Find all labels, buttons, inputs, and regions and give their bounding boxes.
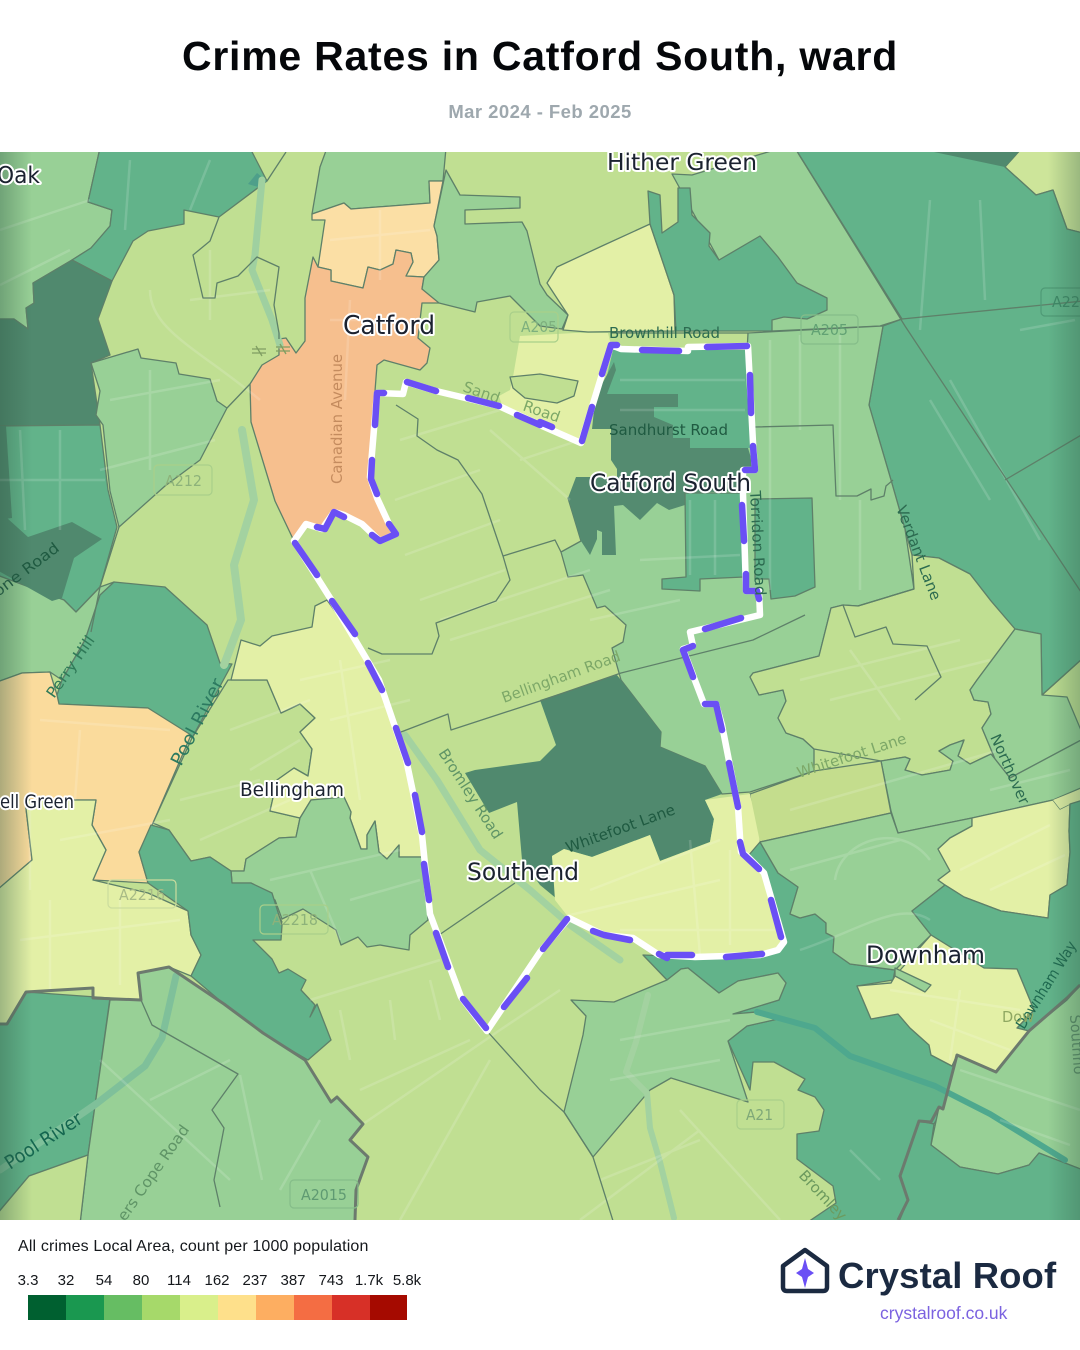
area: north centre medium	[312, 148, 446, 214]
ward outline purple dashes	[295, 345, 781, 1028]
shield: A21	[737, 1100, 784, 1129]
boundary: Sandhurst east block	[755, 425, 893, 500]
place label: Downham: Downham	[866, 941, 985, 969]
area: dark strip top	[915, 148, 1022, 167]
legend tick labels: 237	[242, 1272, 268, 1289]
boundary: north diagonal	[267, 152, 286, 181]
road label: Downham road faded: Dow	[1002, 1008, 1034, 1026]
area: A2218 notch pale	[246, 910, 282, 925]
boundary: railway junction	[227, 384, 250, 408]
place labels	[0, 150, 985, 969]
place label: Catford: Catford	[343, 311, 435, 341]
road label: Verdant Lane: Verdant Lane	[892, 503, 945, 603]
area: north-west teal river fragment	[248, 173, 267, 187]
shield: A205 east	[801, 315, 858, 344]
shield: A2015	[290, 1180, 358, 1208]
legend tick labels	[18, 1272, 422, 1289]
road shields	[108, 288, 1080, 1208]
legend tick labels: 3.3	[18, 1272, 38, 1289]
area boundary lines	[91, 152, 1080, 1224]
thick outer borough boundary	[0, 967, 1080, 1220]
area: Southend pale yellow	[552, 794, 784, 957]
legend colour scale	[28, 1295, 407, 1320]
road labels	[0, 324, 1080, 1224]
area: pale yellow west of ward	[231, 600, 424, 859]
logo url: crystalroof.co.uk	[880, 1303, 1007, 1323]
shield: A2216	[108, 880, 176, 908]
road label: Whitefoot Lane west: Whitefoot Lane	[563, 801, 677, 857]
edge shading	[0, 152, 1080, 1220]
area: Oak medium	[0, 148, 112, 329]
icon: house with star	[780, 1248, 830, 1294]
area: north-centre right medium	[422, 170, 568, 329]
area: light green strip	[510, 374, 578, 403]
boundary: main east-west road	[401, 589, 914, 732]
area: north pale orange	[312, 181, 443, 288]
area: corner pale yellow	[1053, 788, 1080, 809]
boundary: Verdant interior	[843, 605, 1080, 700]
road label: Bromley Road north: Bromley Road	[435, 745, 506, 842]
area: Hither Green strong	[648, 188, 827, 331]
choropleth map	[0, 152, 1080, 1220]
title: Crime Rates in Catford South, ward	[182, 33, 898, 79]
area: lower Northover medium	[881, 739, 1080, 833]
road label: Brownhill Road: Brownhill Road	[609, 324, 720, 342]
boundary: ward interior middle	[503, 540, 561, 556]
legend tick labels: 32	[58, 1272, 74, 1289]
boundary: south-west inner	[141, 1000, 238, 1207]
legend tick labels: 80	[133, 1272, 149, 1289]
shield: A2218	[260, 905, 328, 934]
shield: A22	[1041, 288, 1080, 316]
area: south of Bellingham medium	[231, 797, 428, 950]
area: bottom left light	[0, 1155, 88, 1224]
road label: Torridon Road: Torridon Road	[746, 489, 769, 596]
place label: Bell Green: ell Green	[0, 791, 74, 813]
road label under ward line: Sandhurst Road upper	[461, 378, 562, 426]
river: south-east	[757, 1012, 1065, 1160]
boundary: south-east diagonal	[487, 1031, 614, 1224]
area: west dark	[0, 260, 112, 426]
borough boundary: south-east	[898, 985, 1080, 1220]
road label: Whitefoot Lane east: Whitefoot Lane	[795, 729, 909, 782]
place label: Catford South: Catford South	[590, 469, 751, 497]
map base: light green areas	[0, 152, 1080, 1220]
area: ward central and eastern medium	[561, 326, 914, 794]
place label: Bellingham: Bellingham	[240, 779, 344, 801]
road label: Sandhurst Road: Sandhurst Road	[609, 421, 728, 439]
subtitle: date range: Mar 2024 - Feb 2025	[448, 101, 632, 122]
area: Beckenham Hill medium	[564, 968, 786, 1157]
area: west edge dark strip	[0, 426, 12, 520]
area: Downham medium	[760, 813, 972, 970]
area: Downham Way strong	[912, 800, 1080, 1031]
area: pale yellow Sandhurst strip	[499, 333, 611, 443]
area: south-west medium	[80, 967, 368, 1224]
river: Ravensbourne north	[252, 180, 280, 345]
area: Northover medium	[970, 629, 1080, 778]
area: Whitefoot Lane green	[750, 761, 891, 842]
area: east strong	[795, 148, 1080, 695]
river: Ravensbourne south	[224, 430, 254, 665]
area: east block strong	[755, 498, 815, 599]
area: south-east medium	[931, 982, 1080, 1174]
river: Pool River lower	[0, 976, 176, 1170]
boundary: Southend diagonal	[439, 883, 515, 935]
logo: Crystal Roof	[780, 1248, 1056, 1323]
road label: Canadian Avenue: Canadian Avenue	[328, 354, 346, 484]
river: south stream	[626, 995, 674, 1218]
area: bottom right strong	[898, 1121, 1080, 1224]
shield: A2015: A2015	[301, 1186, 347, 1204]
shield: A212	[154, 465, 212, 495]
shield: A212: A212	[165, 472, 202, 490]
boundary: A22 road	[902, 301, 1080, 480]
area: south ward strong	[643, 842, 957, 1224]
crime-rate areas	[0, 148, 1080, 1224]
area: top right medium	[672, 148, 902, 331]
rail station markers	[252, 344, 290, 356]
shield: A205 west: A205	[521, 318, 557, 336]
road label: Pool River south: Pool River	[1, 1108, 87, 1174]
legend tick labels: 1.7k	[355, 1272, 384, 1289]
boundary: Catford west lower	[91, 527, 119, 632]
area: Bell Green pale orange	[0, 672, 191, 890]
area: lower Bell Green pale yellow	[0, 800, 201, 1024]
legend tick labels: 387	[280, 1272, 306, 1289]
boundary: east railway diagonal	[798, 153, 1080, 595]
area: north-east pale	[1005, 148, 1080, 233]
rivers	[0, 180, 1065, 1218]
area: Catford orange	[250, 250, 441, 541]
legend title: All crimes Local Area, count per 1000 population	[18, 1238, 369, 1255]
area: north-west strong	[72, 148, 267, 281]
boundary: ward interior west	[368, 405, 510, 654]
place label: Southend: Southend	[467, 858, 579, 886]
area: pale yellow north of ward	[547, 224, 675, 332]
area: west strong	[0, 425, 117, 612]
area: Stone Road dark	[0, 517, 102, 601]
area: west lower medium	[0, 575, 114, 682]
legend tick labels: 114	[167, 1272, 191, 1289]
shield: A205 west	[510, 312, 558, 342]
area: south-west strong	[0, 992, 110, 1214]
shield: A2216: A2216	[119, 886, 165, 904]
area: lower Bellingham strong	[139, 825, 331, 1060]
legend	[18, 1238, 422, 1320]
area: ward north dark	[568, 362, 754, 555]
boundary: west of railway	[193, 217, 279, 339]
legend tick labels: 162	[204, 1272, 230, 1289]
river: Southend stream	[405, 735, 620, 960]
road label: Perry Hill: Perry Hill	[43, 632, 99, 701]
area: Perry Hill strong	[57, 582, 232, 738]
legend tick labels: 54	[96, 1272, 112, 1289]
road label: Bellingham Road: Bellingham Road	[499, 647, 623, 707]
area: west middle medium	[91, 349, 227, 527]
road label: Northover: Northover	[986, 731, 1034, 808]
logo wordmark: Crystal Roof	[838, 1255, 1056, 1296]
area: Verdant Lane lighter green	[750, 555, 1015, 775]
area: Downham strip medium	[895, 968, 931, 992]
area: ward central strong	[662, 493, 744, 591]
legend tick labels: 5.8k	[393, 1272, 422, 1289]
shield: A2218: A2218	[272, 911, 318, 929]
road label part: Sand: Sand	[461, 378, 502, 407]
area: east pale yellow	[938, 800, 1070, 918]
area: Downham pale yellow	[857, 935, 1034, 1072]
shield: A21: A21	[746, 1106, 773, 1124]
legend tick labels: 743	[318, 1272, 344, 1289]
borough boundary: south-west	[0, 967, 368, 1220]
road label: Pool River north: Pool River	[167, 675, 229, 769]
shield: A205 east: A205	[811, 321, 848, 339]
boundary: Brownhill Road	[611, 332, 748, 334]
road label part: Road: Road	[521, 397, 562, 426]
area: Bellingham Road dark	[465, 675, 722, 899]
ward outline: Catford South	[294, 345, 784, 1031]
area: Bellingham light green	[153, 680, 315, 871]
area: ward north strong	[595, 350, 752, 448]
ward outline white base	[294, 345, 784, 1031]
local roads	[0, 160, 1080, 1220]
